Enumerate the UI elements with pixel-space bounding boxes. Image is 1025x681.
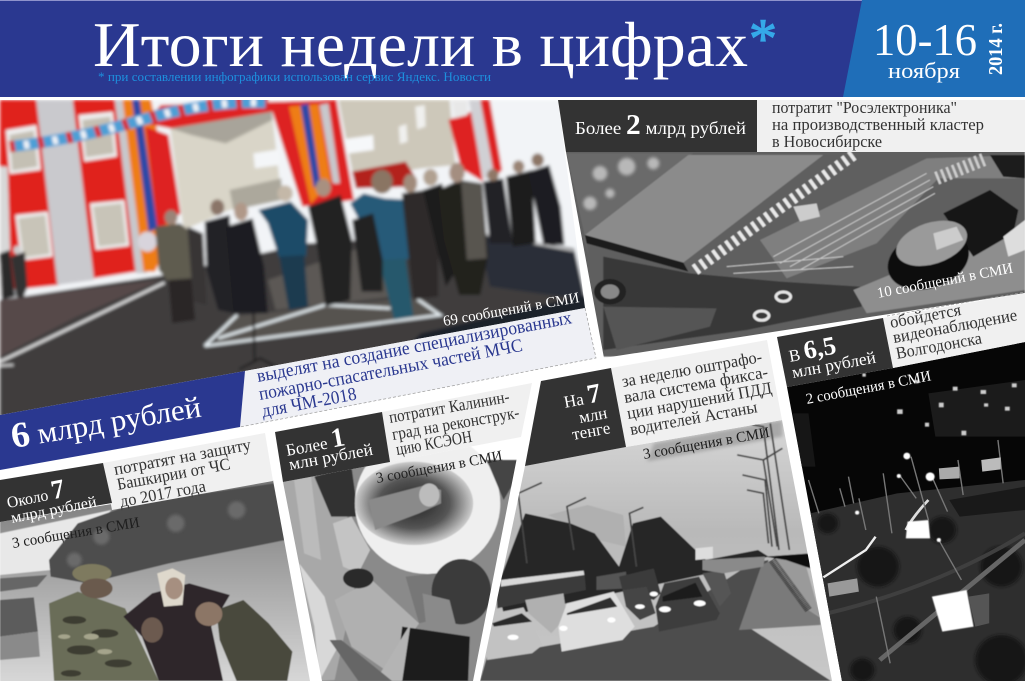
photo: night city xyxy=(780,335,1025,681)
panel: 6 bln rubles figure: 6 млрд рублей xyxy=(8,385,204,456)
date panel xyxy=(843,0,1025,97)
description: вала система фикса- xyxy=(622,362,770,407)
description: потратит Калинин- xyxy=(387,387,511,427)
description: обойдется xyxy=(888,300,963,332)
title: Итоги недели в цифрах xyxy=(93,9,748,80)
description xyxy=(103,433,273,511)
description xyxy=(382,383,532,462)
figure label: млн xyxy=(577,403,609,427)
panel: Bashkiria flood xyxy=(0,433,311,681)
description text: для ЧМ-2018 xyxy=(260,385,358,422)
figure label: Около 7 xyxy=(3,473,67,514)
figure label xyxy=(275,412,390,482)
description: в Новосибирске xyxy=(772,132,882,151)
figure label: Более 2 млрд рублей xyxy=(575,110,746,141)
figure label: Более 1 xyxy=(283,421,347,462)
description: до 2017 года xyxy=(118,476,208,511)
date: 10-16 xyxy=(873,14,977,65)
description: потратят на защиту xyxy=(112,435,253,479)
caption: 69 messages: 69 сообщений в СМИ xyxy=(442,290,581,330)
description: видеонаблюдение xyxy=(891,305,1019,347)
figure label: В 6,5 xyxy=(786,331,838,368)
figure label: тенге xyxy=(571,418,612,444)
description text xyxy=(255,308,574,422)
panel: fire stations photo xyxy=(0,100,600,427)
ground inside photo xyxy=(0,233,600,427)
figure label xyxy=(558,100,757,152)
photo dark band xyxy=(414,294,585,340)
date xyxy=(873,14,1007,83)
panel: Kaliningrad warning system xyxy=(275,383,532,681)
header band xyxy=(0,0,1025,97)
caption: 3 messages: 3 сообщения в СМИ xyxy=(642,425,771,463)
description: на производственный кластер xyxy=(772,115,984,134)
panel: Astana traffic fines xyxy=(480,340,862,681)
figure label xyxy=(525,368,626,466)
description text: пожарно-спасательных частей МЧС xyxy=(257,336,524,405)
photo: loudspeaker xyxy=(283,447,516,681)
date: 2014 г. xyxy=(985,23,1007,75)
description xyxy=(883,292,1025,368)
crowd xyxy=(138,232,157,252)
description: водителей Астаны xyxy=(628,397,759,439)
description: град на реконструк- xyxy=(390,403,521,444)
caption: 2 messages: 2 сообщения в СМИ xyxy=(805,368,933,408)
description: цию КСЭОН xyxy=(394,427,474,459)
figure label xyxy=(0,463,112,527)
description: за неделю оштрафо- xyxy=(620,347,764,391)
caption: 3 messages: 3 сообщения в СМИ xyxy=(375,448,504,487)
description xyxy=(611,340,782,447)
description text: выделят на создание специализированных xyxy=(255,308,574,387)
figure label: млрд рублей xyxy=(10,494,99,527)
description xyxy=(757,98,1025,152)
figure label: млн рублей xyxy=(287,440,374,474)
source note: * при составлении инфографики использован сервис Яндекс. Новости xyxy=(98,70,491,84)
photo: traffic xyxy=(480,420,832,681)
description: потратит "Росэлектроника" xyxy=(772,98,957,117)
caption: 10 messages: 10 сообщений в СМИ xyxy=(876,261,1014,302)
figure label xyxy=(777,318,893,387)
caption: 3 messages: 3 сообщения в СМИ xyxy=(11,515,141,552)
photo: circuit board xyxy=(560,150,1025,357)
description: Башкирии от ЧС xyxy=(115,454,232,494)
figure label: На 7 xyxy=(561,377,603,414)
date: ноября xyxy=(888,58,960,83)
title: * xyxy=(749,8,777,70)
photo: flood rescue xyxy=(0,480,311,681)
panel: Volgodonsk video surveillance xyxy=(777,292,1025,681)
panel: chip photo xyxy=(558,98,1025,357)
panel: 6 bln rubles figure xyxy=(0,371,245,470)
description: Волгодонска xyxy=(894,328,984,363)
panel: 6 bln description xyxy=(240,308,596,427)
figure label: млн рублей xyxy=(790,348,877,382)
description: ции нарушений ПДД xyxy=(625,378,774,423)
